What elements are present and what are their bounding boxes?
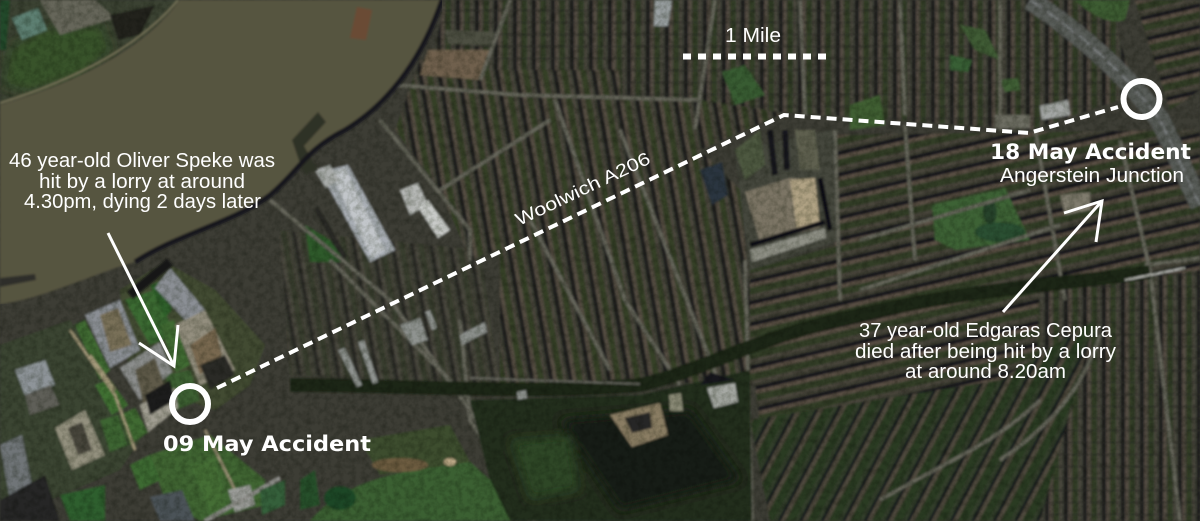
river thames bbox=[0, 0, 442, 304]
small parks top bbox=[722, 65, 765, 105]
heading: 09 May Accident: 09 May Accident bbox=[163, 432, 371, 456]
north bank greenery bbox=[0, 0, 180, 105]
arrow to 18 May marker bbox=[1003, 201, 1102, 312]
callout: Oliver Speke: 46 year-old Oliver Speke was bbox=[9, 150, 275, 172]
heading: 18 May Accident: 18 May Accident bbox=[990, 140, 1191, 164]
streets bbox=[270, 0, 1200, 521]
heading: 18 May Accident: Angerstein Junction bbox=[1000, 165, 1184, 187]
arrow to 09 May marker bbox=[108, 233, 178, 366]
scale dashes bbox=[683, 54, 826, 60]
scale label: 1 Mile bbox=[725, 25, 781, 47]
accident marker: 09 May bbox=[172, 386, 208, 422]
residential estate bbox=[700, 130, 840, 270]
greenwich hospital grounds bbox=[85, 262, 265, 432]
callout: Edgaras Cepura: 37 year-old Edgaras Cepura bbox=[859, 320, 1113, 342]
warehouse complex bbox=[305, 165, 450, 262]
callout: Edgaras Cepura: at around 8.20am bbox=[905, 361, 1066, 383]
woodland bbox=[470, 370, 752, 521]
callout: Oliver Speke: hit by a lorry at around bbox=[39, 171, 245, 193]
south green park bbox=[310, 425, 510, 521]
tree band and railway bbox=[290, 272, 1150, 389]
callout: Edgaras Cepura: died after being hit by a lorry bbox=[855, 341, 1116, 363]
road label: Woolwich A206 bbox=[512, 148, 653, 230]
callout: Edgaras Cepura bbox=[855, 320, 1116, 383]
mid south buildings bbox=[338, 310, 527, 400]
south lawn and queen's house bbox=[60, 430, 320, 521]
park right bbox=[932, 188, 1090, 250]
A102 highway bbox=[1030, 0, 1200, 205]
buildings near junction bbox=[1040, 100, 1070, 120]
accident marker: 18 May bbox=[1124, 81, 1160, 117]
callout: Oliver Speke: 4.30pm, dying 2 days later bbox=[24, 191, 261, 213]
hospital west lawns bbox=[0, 320, 148, 521]
route: Woolwich A206 bbox=[217, 107, 1118, 388]
top warehouses bbox=[420, 50, 490, 80]
callout: Oliver Speke bbox=[9, 150, 275, 213]
heading: 18 May Accident bbox=[990, 140, 1191, 187]
terraced housing blocks bbox=[280, 0, 1200, 521]
